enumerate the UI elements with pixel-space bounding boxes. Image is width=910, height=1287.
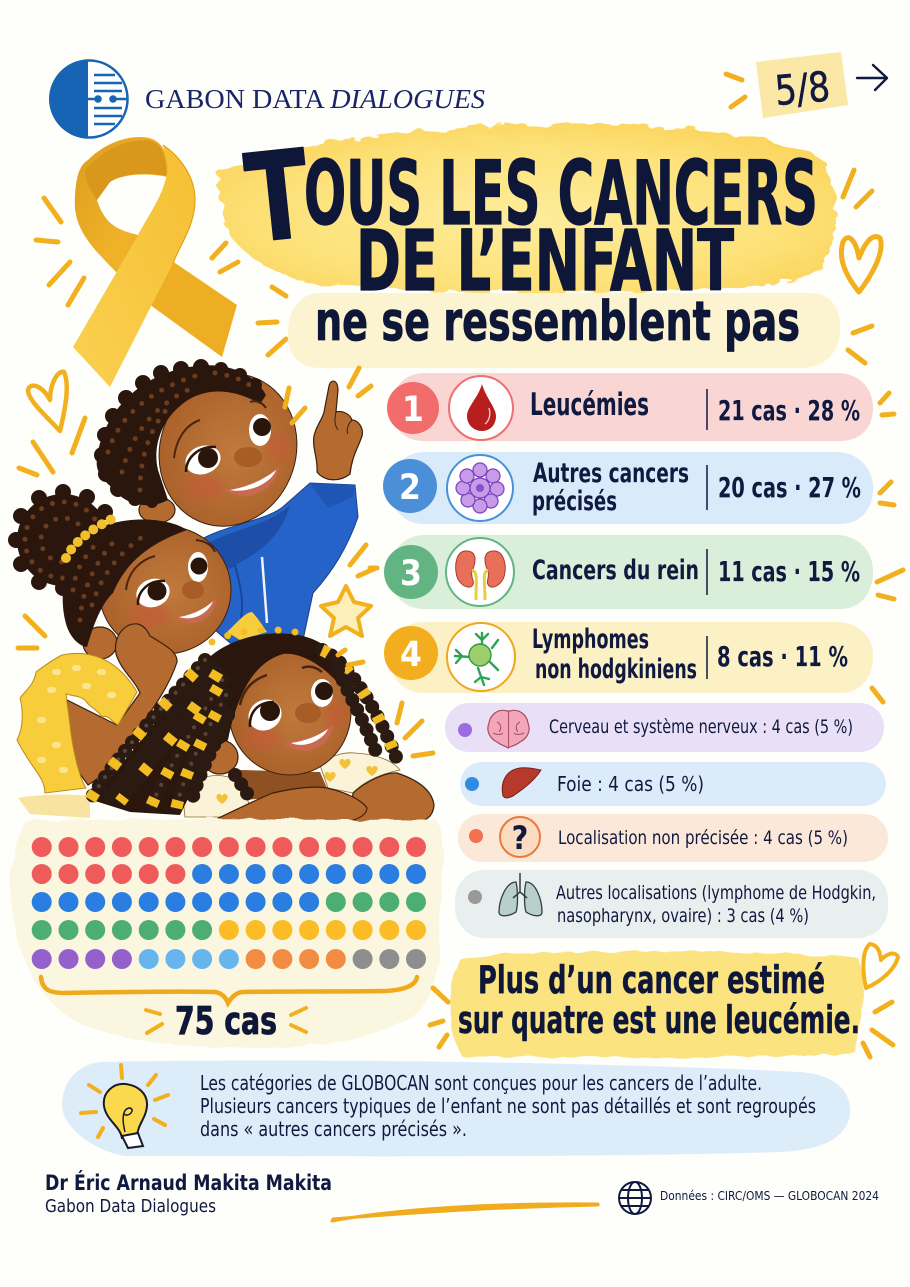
girl 3: face details: [240, 667, 333, 751]
row 1: leucémies: [387, 373, 873, 441]
girl 2: head: [83, 526, 231, 659]
row 2: autres cancers précisés: [383, 452, 873, 524]
waffle chart: 75 cases: [32, 837, 426, 969]
sparks around rows: [370, 393, 903, 702]
girl 2: arm and hand on cheek: [67, 624, 177, 785]
row 4: lymphomes non hodgkiniens: non hodgkiniens: [535, 654, 697, 685]
title: [239, 123, 818, 310]
note text: [200, 1071, 816, 1141]
icon: blood drop: [449, 376, 513, 440]
row 3: cancers du rein: 11 cas · 15 %: [718, 555, 860, 588]
icon: lungs: [499, 873, 542, 916]
icon: light bulb: [81, 1065, 168, 1148]
row 3: cancers du rein: 3: [400, 554, 422, 594]
girl 3: shirt, neck and arms: [182, 753, 434, 822]
icon: gold ribbon: [73, 137, 237, 387]
row: cerveau: [445, 703, 884, 752]
icon: question mark: ?: [512, 819, 528, 857]
row: foie: [460, 762, 886, 806]
row 4: lymphomes non hodgkiniens: Lymphomes: [532, 624, 649, 655]
row 4: lymphomes non hodgkiniens: 4: [400, 635, 422, 675]
subtitle pill: [288, 293, 840, 368]
boy: hand pointing up: [314, 381, 362, 480]
row: autres localisations: [455, 870, 888, 938]
heart left: [28, 372, 67, 431]
girl 3: head: [202, 649, 351, 775]
row 2: autres cancers précisés: précisés: [532, 486, 617, 517]
panel: other localisations: [445, 703, 888, 938]
author: Dr Éric Arnaud Makita Makita: [45, 1170, 332, 1195]
arrow: [857, 65, 887, 90]
girl 2: yellow dress with ruffled sleeve: [17, 653, 137, 793]
boy: ear and head: [139, 356, 316, 544]
title: DE L’ENFANT: [356, 212, 734, 310]
row 2: autres cancers précisés: 20 cas · 27 %: [718, 471, 861, 504]
row 3: cancers du rein: Cancers du rein: [532, 555, 699, 586]
icon: cell cluster: [447, 455, 513, 521]
illustration: three children looking up: [8, 356, 434, 822]
row 2: autres cancers précisés: 2: [399, 468, 421, 508]
row 3: cancers du rein: [384, 535, 873, 609]
icon: globe: [619, 1182, 651, 1214]
icon: kidneys: [446, 538, 514, 606]
icon: question mark: [500, 817, 540, 857]
row 4: lymphomes non hodgkiniens: [384, 622, 873, 693]
girl 2: yellow collar: [227, 612, 267, 640]
panel: top 4 cancers: [383, 373, 873, 693]
source: Données : CIRC/OMS — GLOBOCAN 2024: [660, 1189, 879, 1203]
brace: [41, 977, 417, 1003]
note text: dans « autres cancers précisés ».: [200, 1117, 467, 1141]
row: localisation non précisée: Localisation non précisée : 4 cas (5 %): [558, 827, 848, 849]
panel: dots cream background: [11, 819, 443, 1048]
brand name: GABON DATA DIALOGUES: [145, 84, 486, 114]
yellow ground smear: [18, 795, 90, 818]
note text: Les catégories de GLOBOCAN sont conçues pour les cancers de l’adulte.: [200, 1071, 762, 1095]
row 1: leucémies: 21 cas · 28 %: [718, 394, 860, 427]
author: [45, 1170, 332, 1217]
row 2: autres cancers précisés: Autres cancers: [533, 458, 689, 489]
total: 75 cas: 75 cas: [175, 999, 277, 1043]
row 1: leucémies: 1: [402, 390, 424, 430]
girl 3: hair and braids with beads: [90, 630, 398, 815]
sparks and heart around callout: [430, 944, 898, 1057]
author: Gabon Data Dialogues: [45, 1196, 216, 1217]
callout: key message: [450, 951, 862, 1058]
page counter 5/8: 5/8: [773, 62, 832, 115]
note text: Plusieurs cancers typiques de l’enfant ne sont pas détaillés et sont regroupés: [200, 1094, 816, 1118]
title: T: [239, 123, 316, 271]
star: [321, 586, 371, 636]
boy: curly hair: [94, 359, 266, 508]
girl 2: face details: [126, 540, 217, 623]
icon: lymphocyte: [447, 623, 515, 691]
heart right of title: [841, 236, 881, 292]
row 1: leucémies: Leucémies: [530, 387, 649, 423]
decorative sparks around header: [36, 170, 872, 363]
boy: hoodie: [200, 483, 358, 660]
row: localisation non précisée: [458, 814, 888, 862]
page counter 5/8: [726, 52, 848, 118]
girl 2: bun and hair: [8, 484, 187, 647]
logo: Gabon Data Dialogues: [49, 60, 128, 138]
row: cerveau: Cerveau et système nerveux : 4 cas (5 %): [549, 716, 853, 738]
underline stroke: [332, 1204, 598, 1221]
icon: liver: [502, 768, 541, 798]
row 4: lymphomes non hodgkiniens: 8 cas · 11 %: [717, 640, 848, 673]
sparks around children: [18, 368, 433, 756]
icon: brain: [488, 710, 529, 748]
boy: face details: [174, 401, 279, 496]
title brush background: [218, 124, 836, 293]
row: autres localisations: nasopharynx, ovaire) : 3 cas (4 %): [557, 905, 809, 927]
note panel: [62, 1060, 850, 1156]
row: foie: Foie : 4 cas (5 %): [557, 772, 704, 796]
